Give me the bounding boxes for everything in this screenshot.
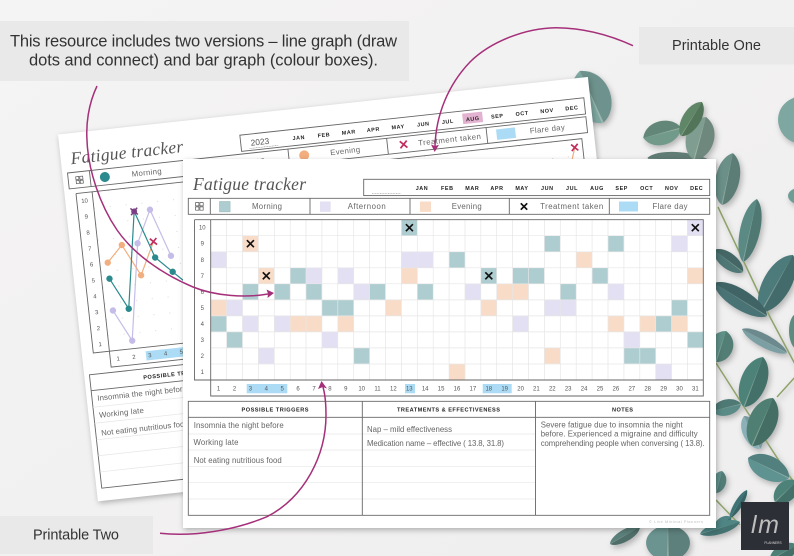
month selector: AUG	[590, 186, 604, 192]
x axis day labels: 16	[454, 386, 461, 392]
panel: printable two, line graph sheet: 9	[84, 214, 89, 221]
x axis day labels: 31	[692, 386, 699, 392]
callout: versions note: This resource includes two versions – line graph (draw	[10, 32, 397, 50]
month selector: NOV	[665, 186, 678, 192]
panel: printable two, line graph sheet: POSSIBLE TRIGGERS	[143, 368, 211, 381]
month selector: APR	[490, 186, 504, 192]
x axis day labels: 7	[312, 386, 316, 392]
month selector: FEB	[441, 186, 454, 192]
panel: printable two, line graph sheet: Not eating nutritious food	[101, 419, 189, 438]
x axis day labels: 26	[613, 386, 620, 392]
x axis day labels: 10	[358, 386, 366, 392]
panel: printable two, line graph sheet: NOV	[540, 108, 554, 115]
panel: printable two, line graph sheet: Fatigue tracker	[69, 136, 184, 168]
month selector: SEP	[615, 186, 628, 192]
x axis day labels: 18	[485, 386, 493, 392]
y axis labels: 2	[201, 354, 205, 360]
x axis day labels: 21	[533, 386, 540, 392]
panel: printable two, line graph sheet	[58, 77, 628, 501]
x axis day labels: 9	[344, 386, 348, 392]
legend: Afternoon	[348, 202, 386, 211]
x axis day labels: 12	[390, 386, 397, 392]
x axis day labels: 2	[233, 386, 237, 392]
month selector: JUN	[541, 186, 554, 192]
legend: Treatment taken	[540, 202, 603, 211]
copyright: © Live Minimal Planners	[649, 519, 703, 524]
panel: printable two, line graph sheet: 7	[88, 246, 93, 253]
flare day highlights	[247, 384, 512, 393]
treatments text: Nap – mild effectiveness	[367, 425, 452, 434]
panel: printable two, line graph sheet: 5	[91, 278, 96, 285]
notes text	[541, 420, 705, 448]
legend: Morning	[252, 202, 282, 211]
panel: printable two, line graph sheet: MAR	[342, 129, 356, 137]
panel: printable two, line graph sheet: 5	[180, 350, 184, 356]
notes table: NOTES	[612, 408, 633, 414]
x axis day labels: 4	[265, 386, 269, 392]
title: fatigue tracker: Fatigue tracker	[192, 174, 306, 194]
y axis labels: 7	[201, 274, 205, 280]
panel: printable two, line graph sheet: 1	[116, 356, 121, 363]
x axis day labels: 17	[470, 386, 477, 392]
logo: lm	[751, 511, 779, 539]
panel: printable two, line graph sheet: DEC	[565, 105, 579, 113]
callout: versions note: dots and connect) and bar graph (colour boxes).	[29, 52, 378, 70]
panel: printable two, line graph sheet: Insomnia the night before	[97, 384, 187, 403]
panel: printable two, line graph sheet: 2	[132, 355, 137, 361]
triggers text: Working late	[194, 438, 238, 447]
y axis labels	[199, 226, 206, 376]
panel: printable two, line graph sheet: 8	[86, 230, 91, 237]
legend: Flare day	[652, 202, 688, 211]
x axis day labels: 13	[406, 386, 413, 392]
panel: printable two, line graph sheet: Treatment taken	[418, 132, 481, 148]
month selector: MAR	[465, 186, 479, 192]
panel: printable one, bar graph sheet	[183, 159, 716, 528]
month selector: JAN	[416, 186, 428, 192]
y axis labels: 8	[201, 258, 205, 264]
callout: printable two: Printable Two	[33, 528, 119, 544]
treatments text: Medication name – effective ( 13.8, 31.8)	[367, 439, 504, 448]
panel: printable two, line graph sheet: Morning	[131, 167, 162, 179]
notes table: TREATMENTS & EFFECTIVENESS	[397, 408, 500, 414]
callout: printable one	[639, 27, 794, 64]
panel: printable two, line graph sheet: JAN	[292, 135, 305, 142]
x axis day labels: 25	[597, 386, 604, 392]
evening cells	[211, 236, 703, 380]
x axis day labels: 29	[660, 386, 668, 392]
arrow: printable one	[431, 28, 633, 152]
afternoon cells	[211, 220, 703, 380]
month selector: OCT	[640, 186, 653, 192]
y axis labels: 10	[199, 226, 206, 232]
legend: Evening	[452, 202, 482, 211]
notes text: Severe fatigue due to insomnia the night	[541, 420, 684, 429]
x axis day labels: 11	[374, 386, 381, 392]
triggers text: Not eating nutritious food	[194, 456, 282, 465]
notes text: before. Experienced a migraine and difficulty	[541, 430, 698, 439]
y axis labels: 4	[201, 322, 205, 328]
x axis day labels	[217, 386, 699, 392]
morning cells	[211, 220, 703, 364]
icon: grid of four shapes	[196, 203, 203, 210]
panel: printable two, line graph sheet: MAY	[391, 124, 405, 131]
panel: printable two, line graph sheet: Afternoon	[226, 155, 265, 168]
bar graph grid	[194, 220, 703, 396]
panel: printable two, line graph sheet: 2	[97, 326, 101, 332]
x axis day labels: 30	[676, 386, 683, 392]
x axis day labels: 1	[217, 386, 221, 392]
panel: printable two, line graph sheet: 3	[95, 310, 99, 316]
x axis day labels: 14	[422, 386, 429, 392]
panel: printable two, line graph sheet: 3	[148, 353, 153, 359]
eucalyptus leaves behind sheets	[563, 63, 794, 556]
callout: printable two	[0, 516, 153, 554]
month selector: DEC	[690, 186, 703, 192]
panel: printable two, line graph sheet: 6	[90, 262, 94, 269]
y axis labels: 9	[201, 242, 205, 248]
y axis labels: 1	[201, 370, 205, 376]
notes text: comprehending people when conversing ( 13.8).	[541, 439, 705, 448]
panel: printable two, line graph sheet: OCT	[515, 111, 529, 118]
panel: printable two, line graph sheet: Flare day	[529, 123, 565, 135]
arrow: to line graph and bar graph sheet	[87, 86, 274, 298]
panel: printable two, line graph sheet: FEB	[317, 132, 331, 139]
panel: printable two, line graph sheet: SEP	[491, 113, 504, 121]
panel: printable two, line graph sheet: 4	[164, 351, 168, 358]
x axis day labels: 27	[628, 386, 636, 392]
x axis day labels: 8	[328, 386, 332, 392]
panel: printable two, line graph sheet: Working late	[99, 406, 144, 420]
month selector: JUL	[566, 186, 578, 192]
panel: printable two, line graph sheet: APR	[367, 127, 380, 134]
x axis day labels: 5	[281, 386, 285, 392]
triggers text	[194, 421, 284, 465]
x axis day labels: 15	[438, 386, 445, 392]
treatment taken markers	[247, 224, 699, 279]
month selector	[364, 179, 710, 196]
notes table	[188, 401, 710, 515]
arrow: printable two	[160, 381, 327, 534]
panel: printable two, line graph sheet: JUL	[442, 119, 454, 126]
y axis labels: 3	[201, 338, 205, 344]
panel: printable two, line graph sheet: AUG	[466, 116, 480, 123]
month selector: MAY	[515, 186, 529, 192]
logo	[741, 502, 789, 550]
y axis labels: 6	[201, 290, 205, 296]
x axis day labels: 6	[296, 386, 300, 392]
x axis day labels: 20	[517, 386, 525, 392]
panel: printable two, line graph sheet: JUN	[417, 121, 430, 129]
x axis day labels: 28	[644, 386, 652, 392]
callout: printable one: Printable One	[672, 38, 761, 54]
notes table: POSSIBLE TRIGGERS	[242, 408, 309, 414]
panel: printable two, line graph sheet: 1	[98, 342, 103, 348]
triggers text: Insomnia the night before	[194, 421, 284, 430]
x axis day labels: 19	[501, 386, 509, 392]
panel: printable two, line graph sheet: 2023	[250, 136, 270, 148]
x axis day labels: 22	[549, 386, 556, 392]
callout: versions note	[0, 21, 409, 81]
y axis labels: 5	[201, 306, 205, 312]
x axis day labels: 23	[565, 386, 572, 392]
legend	[188, 198, 710, 214]
logo: PLANNERS	[764, 541, 782, 545]
treatments text	[367, 425, 504, 448]
panel: printable two, line graph sheet: Evening	[330, 145, 361, 157]
panel: printable two, line graph sheet: 10	[81, 198, 89, 205]
x axis day labels: 24	[581, 386, 588, 392]
panel: printable two, line graph sheet: 4	[93, 294, 98, 301]
x axis day labels: 3	[249, 386, 253, 392]
